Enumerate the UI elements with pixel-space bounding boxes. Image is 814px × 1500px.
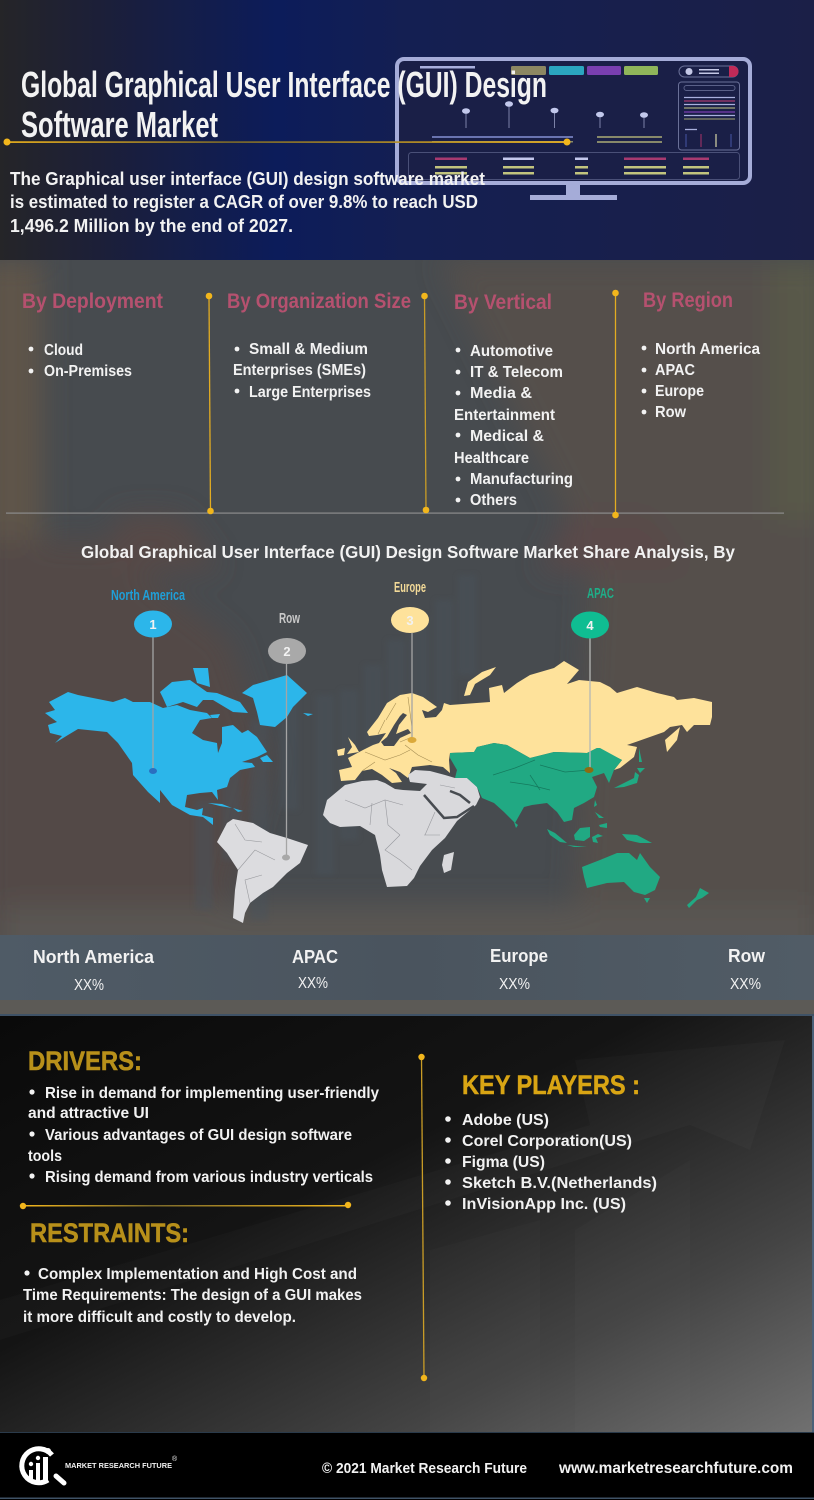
panel: regional share strip	[0, 935, 814, 1000]
title: Global Graphical User Interface (GUI) Design	[21, 64, 547, 105]
marker: europe: 3	[406, 613, 414, 628]
list: vertical: Medical &	[470, 428, 544, 445]
marker: row: Row	[279, 610, 300, 627]
divider: section border	[0, 1014, 814, 1016]
stat: apac	[292, 947, 338, 992]
list: vertical: IT & Telecom	[470, 364, 563, 381]
marker: row	[268, 610, 306, 860]
heading: drivers: DRIVERS:	[28, 1046, 142, 1076]
list: key players: Corel Corporation(US)	[462, 1133, 632, 1150]
list: key players	[445, 1112, 657, 1213]
list: key players: Sketch B.V.(Netherlands)	[462, 1175, 657, 1192]
panel: by vertical	[454, 291, 573, 509]
title underline	[4, 138, 570, 146]
map: baltic sea	[381, 713, 411, 746]
stat: north america: North America	[33, 947, 155, 967]
marker: europe	[391, 579, 429, 743]
panel: by deployment	[22, 290, 163, 380]
list: key players: InVisionApp Inc. (US)	[462, 1196, 626, 1213]
text: restraints: Complex Implementation and High Cost and	[38, 1266, 357, 1283]
title: Software Market	[21, 104, 218, 145]
intro paragraph: is estimated to register a CAGR of over 9.8% to reach USD	[10, 192, 478, 212]
list: region: Europe	[655, 383, 704, 400]
stat: row	[728, 946, 766, 993]
marker: north america: 1	[149, 617, 157, 632]
panel: footer	[0, 1432, 814, 1500]
list: region	[642, 341, 760, 421]
heading: by deployment: By Deployment	[22, 290, 163, 313]
panel: by region	[642, 289, 760, 421]
title	[21, 64, 547, 145]
text: restraints	[23, 1266, 362, 1326]
chart: world map	[45, 579, 712, 923]
text: restraints: Time Requirements: The design of a GUI makes	[23, 1287, 362, 1304]
stat: europe: XX%	[499, 976, 530, 993]
marker: row: 2	[283, 644, 291, 659]
intro paragraph: The Graphical user interface (GUI) design software market	[10, 169, 485, 189]
divider: gold line	[20, 1202, 351, 1209]
list: key players: Adobe (US)	[462, 1112, 549, 1129]
marker: europe: Europe	[394, 579, 426, 596]
list: vertical: Entertainment	[454, 407, 555, 424]
stat: apac: APAC	[292, 947, 338, 967]
heading: by organization size: By Organization Size	[227, 290, 411, 313]
connector: vertical gold line	[418, 1054, 427, 1381]
divider: segmentation baseline	[6, 512, 784, 514]
map: europe and russia	[337, 661, 712, 783]
list: drivers: Rise in demand for implementing user-friendly	[45, 1085, 379, 1102]
list: drivers: Rising demand from various industry verticals	[45, 1169, 373, 1186]
map: asia pacific	[450, 743, 709, 908]
list: region: Row	[655, 404, 687, 421]
list: vertical: Media &	[470, 385, 532, 402]
panel: header band	[0, 0, 814, 260]
list: vertical: Others	[470, 492, 517, 509]
stat: europe: Europe	[490, 946, 548, 966]
stat: europe	[490, 946, 548, 993]
list: vertical: Manufacturing	[470, 471, 573, 488]
map: north america	[45, 668, 313, 825]
stat: row: Row	[728, 946, 766, 966]
text: brand name	[65, 1455, 178, 1470]
panel: segmentation and map photo background	[0, 260, 814, 1016]
panel: drivers restraints key players	[0, 1016, 814, 1432]
list: vertical: Automotive	[470, 343, 553, 360]
heading: market share analysis: Global Graphical User Interface (GUI) Design Software Market Share Analysis, By	[81, 542, 735, 562]
list: drivers	[28, 1085, 379, 1186]
text: restraints: it more difficult and costly to develop.	[23, 1309, 296, 1326]
heading: by vertical: By Vertical	[454, 291, 552, 314]
list: organization size: Large Enterprises	[249, 384, 371, 401]
list: key players: Figma (US)	[462, 1154, 545, 1171]
map: europe borders	[362, 697, 432, 771]
stat: apac: XX%	[298, 975, 328, 992]
list: vertical: Healthcare	[454, 450, 529, 467]
list: drivers: Various advantages of GUI design software	[45, 1127, 352, 1144]
intro paragraph: 1,496.2 Million by the end of 2027.	[10, 216, 293, 236]
list: region: APAC	[655, 362, 695, 379]
icon: market research future logo	[22, 1448, 64, 1483]
list: vertical	[454, 343, 573, 509]
panel: by organization size	[227, 290, 411, 401]
list: drivers: and attractive UI	[28, 1105, 149, 1122]
list: deployment	[29, 342, 132, 380]
list: organization size: Enterprises (SMEs)	[233, 362, 366, 379]
marker: north america: North America	[111, 587, 185, 604]
icon: dashboard monitor	[397, 59, 750, 200]
map: africa and middle east	[323, 770, 480, 887]
connector: gold line 2	[421, 293, 429, 513]
heading: restraints: RESTRAINTS:	[30, 1218, 189, 1248]
stat: row: XX%	[730, 976, 761, 993]
list: region: North America	[655, 341, 760, 358]
list: deployment: On-Premises	[44, 363, 132, 380]
stat: north america	[33, 947, 155, 994]
list: drivers: tools	[28, 1148, 62, 1165]
marker: north america	[111, 587, 185, 774]
text: website: www.marketresearchfuture.com	[558, 1460, 793, 1477]
marker: apac: 4	[586, 618, 594, 633]
connector: gold line 3	[612, 290, 619, 518]
map: south america	[217, 819, 308, 923]
list: organization size: Small & Medium	[249, 341, 368, 358]
heading: by region: By Region	[643, 289, 733, 312]
text: copyright: © 2021 Market Research Future	[322, 1460, 527, 1477]
text: brand name: ®	[172, 1455, 178, 1463]
stat: north america: XX%	[74, 977, 104, 994]
marker: apac: APAC	[587, 585, 614, 602]
intro paragraph	[10, 169, 485, 236]
list: organization size	[233, 341, 371, 401]
list: deployment: Cloud	[44, 342, 83, 359]
text: brand name: MARKET RESEARCH FUTURE	[65, 1463, 172, 1470]
connector: gold line 1	[206, 293, 214, 514]
heading: key players: KEY PLAYERS :	[462, 1070, 640, 1100]
marker: apac	[571, 585, 614, 773]
